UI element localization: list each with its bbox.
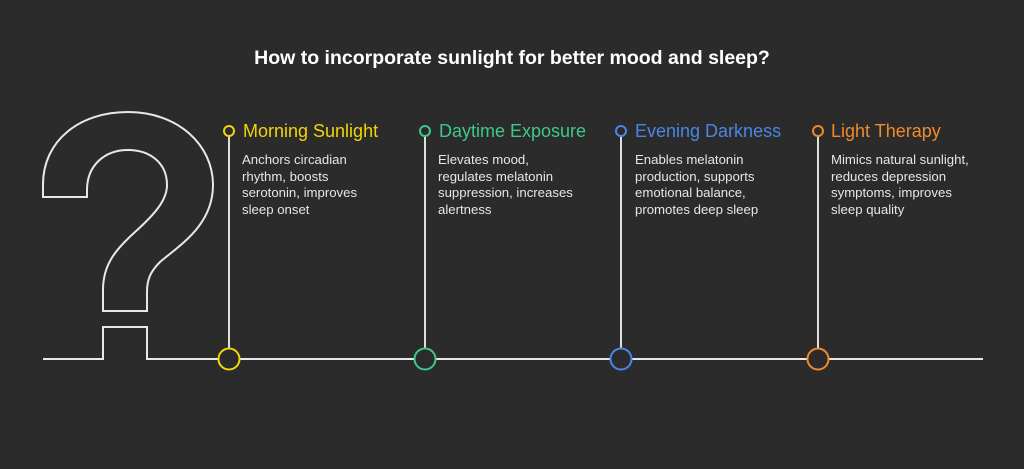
- text: light therapy: symptoms, improves: [831, 185, 952, 200]
- text: morning: sleep onset: [242, 202, 309, 216]
- text: light therapy: Mimics natural sunlight,: [831, 152, 969, 167]
- text: daytime: suppression, increases: [438, 185, 573, 200]
- text: evening: [635, 152, 758, 216]
- heading: daytime exposure: Daytime Exposure: [439, 121, 586, 141]
- title: How to incorporate sunlight for better mood and sleep?: [254, 47, 770, 69]
- marker: morning: [218, 126, 240, 370]
- text: morning: [242, 152, 357, 216]
- heading: evening darkness: Evening Darkness: [635, 121, 781, 141]
- text: light therapy: reduces depression: [831, 168, 946, 184]
- heading: light therapy: Light Therapy: [831, 121, 941, 141]
- marker: light therapy: [808, 126, 828, 370]
- marker: evening: [610, 126, 632, 370]
- text: morning: rhythm, boosts: [242, 168, 328, 184]
- heading: morning sunlight: Morning Sunlight: [243, 121, 378, 141]
- text: evening: promotes deep sleep: [635, 202, 758, 216]
- text: evening: production, supports: [635, 168, 754, 184]
- text: daytime: alertness: [438, 202, 492, 216]
- marker: daytime: [414, 126, 436, 370]
- text: daytime: regulates melatonin: [438, 168, 553, 184]
- text: morning: serotonin, improves: [242, 185, 357, 200]
- text: evening: emotional balance,: [635, 185, 746, 200]
- text: daytime: [438, 152, 573, 216]
- text: evening: Enables melatonin: [635, 152, 744, 167]
- icon: question mark: [43, 112, 983, 359]
- text: morning: Anchors circadian: [242, 152, 347, 167]
- text: daytime: Elevates mood,: [438, 152, 529, 167]
- text: light therapy: sleep quality: [831, 202, 904, 216]
- text: light therapy: [831, 152, 969, 216]
